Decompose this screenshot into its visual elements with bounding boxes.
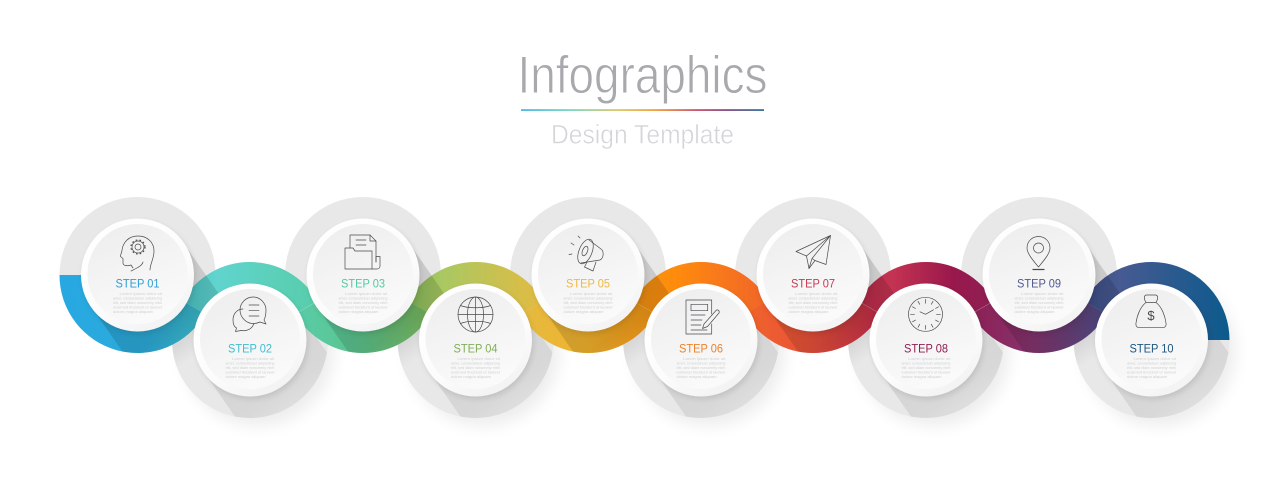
body text: dolore magna aliquam [226, 375, 266, 379]
body text: elit, sed diam nonummy nibh [788, 301, 838, 305]
icon: document and pencil [686, 300, 719, 334]
body text: dolore magna aliquam [338, 310, 379, 314]
body text: amet, consectetuer adipiscing [338, 296, 388, 300]
label: STEP 07 [791, 277, 835, 291]
body text: dolore magna aliquam [1127, 375, 1167, 379]
label: STEP 09 [1017, 277, 1061, 291]
body text [451, 357, 500, 379]
body text: Lorem ipsum dolor sit [1134, 357, 1176, 361]
step 04 panel [419, 284, 534, 399]
body text: euismod tincidunt ut laoreet [226, 370, 274, 374]
body text: Lorem ipsum dolor sit [458, 357, 500, 361]
step 08 panel [870, 284, 984, 399]
icon: megaphone [569, 236, 603, 271]
icon: clock [908, 297, 942, 331]
label: STEP 05 [566, 277, 610, 291]
icon: head with gear [120, 236, 154, 271]
body text: elit, sed diam nonummy nibh [676, 366, 726, 370]
icon: money bag: $ [1147, 308, 1155, 323]
label: STEP 10 [1130, 342, 1174, 356]
body text: elit, sed diam nonummy nibh [564, 301, 612, 305]
body text [1014, 292, 1064, 314]
step 01 panel [81, 218, 196, 334]
body text: amet, consectetuer adipiscing [676, 362, 726, 366]
body text [338, 292, 388, 314]
step 06 panel [644, 284, 759, 399]
title: Infographics [518, 46, 768, 105]
body text: Lorem ipsum dolor sit [908, 357, 950, 361]
step 09 panel [982, 218, 1097, 334]
ribbon [60, 262, 1230, 353]
body text: elit, sed diam nonummy nibh [1014, 301, 1064, 305]
body text: amet, consectetuer adipiscing [788, 296, 838, 300]
body text: euismod tincidunt ut laoreet [676, 370, 726, 374]
icon: globe [458, 297, 493, 332]
body text: euismod tincidunt ut laoreet [113, 306, 162, 310]
body text: dolore magna aliquam [113, 310, 153, 314]
subtitle: Design Template [551, 120, 734, 150]
body text: Lorem ipsum dolor sit [232, 357, 274, 361]
body text: dolore magna aliquam [564, 310, 604, 314]
label: STEP 04 [454, 342, 498, 356]
step 07 panel [756, 218, 871, 334]
body text [226, 357, 274, 379]
grey backing discs [60, 197, 1230, 418]
step 03 panel [306, 218, 421, 334]
body text [676, 357, 726, 379]
body text: amet, consectetuer adipiscing [226, 362, 274, 366]
title underline [521, 109, 764, 111]
body text: Lorem ipsum dolor sit [1021, 292, 1064, 296]
step 10 panel [1095, 284, 1210, 399]
body text: dolore magna aliquam [676, 375, 717, 379]
body text [902, 357, 950, 379]
body text: Lorem ipsum dolor sit [683, 357, 726, 361]
body text: euismod tincidunt ut laoreet [451, 370, 500, 374]
body text: elit, sed diam nonummy nibh [338, 301, 388, 305]
body text: amet, consectetuer adipiscing [564, 296, 612, 300]
body text: euismod tincidunt ut laoreet [564, 306, 612, 310]
body text [1127, 357, 1176, 379]
long shadows of upper circles on the ribbon [96, 249, 1120, 358]
body text: amet, consectetuer adipiscing [1014, 296, 1064, 300]
body text: Lorem ipsum dolor sit [795, 292, 838, 296]
body text: Lorem ipsum dolor sit [120, 292, 162, 296]
label: STEP 08 [904, 342, 948, 356]
body text: dolore magna aliquam [902, 375, 942, 379]
icon: speech bubbles [233, 297, 266, 332]
soft outer shadows of lower discs [182, 274, 1236, 426]
icon: map pin [1027, 236, 1050, 270]
label: STEP 06 [679, 342, 723, 356]
label: STEP 01 [116, 277, 160, 291]
body text: elit, sed diam nonummy nibh [451, 366, 500, 370]
icon: folder with document [345, 235, 380, 269]
body text: dolore magna aliquam [788, 310, 829, 314]
body text: elit, sed diam nonummy nibh [902, 366, 950, 370]
body text: euismod tincidunt ut laoreet [902, 370, 950, 374]
body text: amet, consectetuer adipiscing [902, 362, 950, 366]
label: STEP 03 [341, 277, 385, 291]
body text: dolore magna aliquam [451, 375, 491, 379]
body text: amet, consectetuer adipiscing [451, 362, 500, 366]
step 05 panel [532, 218, 646, 334]
label: STEP 02 [228, 342, 272, 356]
body text [113, 292, 162, 314]
long shadows of lower circles on the grey discs [208, 328, 1228, 418]
body text: Lorem ipsum dolor sit [570, 292, 612, 296]
body text: elit, sed diam nonummy nibh [1127, 366, 1176, 370]
body text: elit, sed diam nonummy nibh [226, 366, 274, 370]
body text: dolore magna aliquam [1014, 310, 1055, 314]
body text: euismod tincidunt ut laoreet [1014, 306, 1064, 310]
body text: Lorem ipsum dolor sit [345, 292, 388, 296]
body text: euismod tincidunt ut laoreet [1127, 370, 1176, 374]
body text [564, 292, 612, 314]
body text [788, 292, 838, 314]
icon: paper plane [796, 236, 830, 268]
step 02 panel [194, 284, 308, 399]
body text: euismod tincidunt ut laoreet [788, 306, 838, 310]
body text: amet, consectetuer adipiscing [1127, 362, 1176, 366]
body text: euismod tincidunt ut laoreet [338, 306, 388, 310]
body text: elit, sed diam nonummy nibh [113, 301, 162, 305]
body text: amet, consectetuer adipiscing [113, 296, 162, 300]
